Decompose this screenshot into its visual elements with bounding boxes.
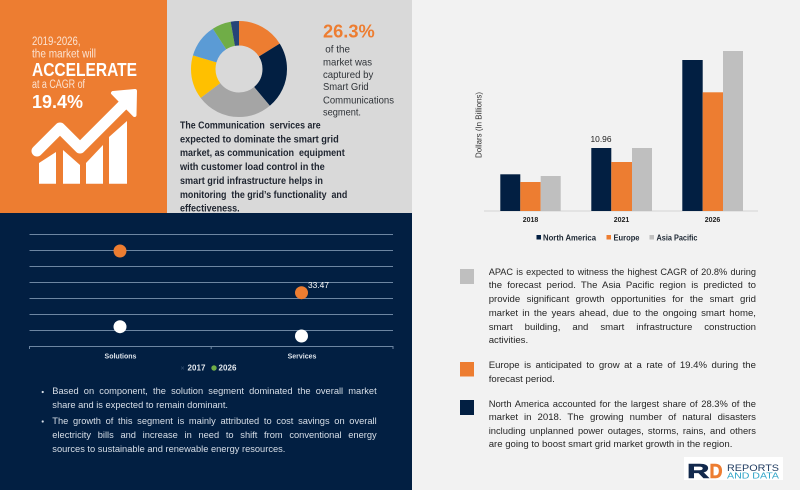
- text block: APAC: activities.: [489, 335, 528, 346]
- chart: regional bars: [474, 51, 758, 242]
- text block: component bullets: [42, 385, 377, 457]
- text block: APAC: smart building, and smart infrastructure construction: [489, 322, 756, 333]
- legend: years: 2017: [188, 364, 206, 373]
- callout: 26.3%: market was: [323, 57, 372, 69]
- chart: donut: [203, 33, 275, 105]
- text block: North America: North America accounted for the largest share of 28.3% of the: [489, 398, 756, 409]
- heading: CAGR text: 2019-2026,: [32, 36, 80, 48]
- text block: Europe: Europe is anticipated to grow at a rate of 19.4% during the: [489, 360, 756, 371]
- callout: 26.3%: 26.3%: [323, 21, 375, 42]
- icon: growth chart arrow: [37, 91, 135, 184]
- text block: North America: are going to boost smart grid market growth in the region.: [489, 439, 732, 450]
- heading: CAGR text: the market will: [32, 49, 96, 61]
- text block: communication services: [179, 121, 347, 214]
- callout: 26.3%: [323, 21, 394, 118]
- text block: component bullets: sources to sustainable and renewable energy resources.: [52, 444, 285, 454]
- text block: Europe: forecast period.: [489, 374, 555, 385]
- logo: Reports and Data: D: [710, 461, 722, 483]
- heading: CAGR text: ACCELERATE: [32, 60, 137, 80]
- text block: APAC: [460, 266, 756, 350]
- text block: APAC: provide significant growth opportunities for the smart grid: [489, 294, 756, 305]
- icon: navy marker: [460, 400, 474, 415]
- legend: years: 2026: [218, 364, 237, 373]
- text block: communication services: The Communication services are: [180, 121, 321, 132]
- chart: dot plot: 33.47: [308, 280, 329, 290]
- text block: communication services: with customer load control in the: [179, 162, 325, 173]
- text block: component bullets: Based on component, the solution segment dominated the overall market: [52, 386, 377, 396]
- logo: Reports and Data: [684, 457, 783, 483]
- heading: CAGR text: 19.4%: [32, 92, 83, 112]
- callout: 26.3%: Communications: [323, 94, 394, 106]
- text block: APAC: market in the years ahead, due to the ongoing smart home,: [489, 308, 756, 319]
- heading: CAGR text: at a CAGR of: [32, 79, 86, 91]
- text block: communication services: smart grid infrastructure helps in: [180, 176, 323, 187]
- icon: gray marker: [460, 269, 474, 284]
- panel: component navy: [0, 213, 412, 490]
- heading: CAGR text: [32, 36, 137, 112]
- chart: dot plot: [30, 234, 393, 373]
- callout: 26.3%: captured by: [323, 69, 374, 81]
- chart: regional bars: 2018: [523, 217, 538, 224]
- legend: regions: North America: [543, 232, 596, 242]
- legend: years: ×: [180, 366, 185, 372]
- text block: North America: market in 2018. The growing number of natural disasters: [489, 412, 756, 423]
- text block: APAC: APAC is expected to witness the highest CAGR of 20.8% during: [489, 266, 756, 276]
- logo: Reports and Data: R: [687, 460, 710, 483]
- legend: regions: Asia Pacific: [656, 232, 698, 242]
- chart: regional bars: 2026: [705, 217, 720, 224]
- text block: communication services: effectiveness.: [180, 203, 240, 214]
- panel: CAGR orange: [0, 0, 167, 213]
- logo: Reports and Data: REPORTS: [727, 463, 779, 473]
- text block: component bullets: share and is expected to remain dominant.: [52, 400, 228, 410]
- callout: 26.3%: of the: [325, 44, 350, 56]
- text block: component bullets: The growth of this segment is mainly attributed to cost savings on overall: [52, 416, 377, 426]
- legend: years: [180, 364, 237, 373]
- panel: communications segment: [167, 0, 412, 214]
- text block: North America: including unplanned power outages, storms, rains, and others: [489, 425, 756, 436]
- text block: Europe: [460, 359, 756, 387]
- legend: regions: Europe: [614, 232, 640, 242]
- chart: dot plot: Services: [288, 354, 317, 361]
- text block: North America: [460, 397, 756, 453]
- icon: orange marker: [460, 362, 474, 376]
- chart: regional bars: 2021: [614, 217, 629, 224]
- callout: 26.3%: segment.: [323, 106, 361, 118]
- text block: communication services: expected to dominate the smart grid: [180, 134, 339, 145]
- legend: regions: [536, 232, 698, 242]
- text block: APAC: the forecast period. The Asia Pacific region is predicted to: [489, 280, 756, 291]
- chart: regional bars: 10.96: [590, 134, 612, 144]
- text block: component bullets: electricity bills and increase in need to shift from conventional energy: [52, 430, 377, 440]
- text block: communication services: monitoring the grid’s functionality and: [180, 190, 347, 201]
- chart: dot plot: Solutions: [105, 354, 137, 361]
- text block: communication services: market, as communication equipment: [180, 148, 345, 159]
- callout: 26.3%: Smart Grid: [323, 81, 369, 93]
- axis title: Dollars (In Billions): [474, 92, 484, 158]
- logo: Reports and Data: AND DATA: [727, 471, 780, 480]
- panel: right background: [412, 0, 800, 490]
